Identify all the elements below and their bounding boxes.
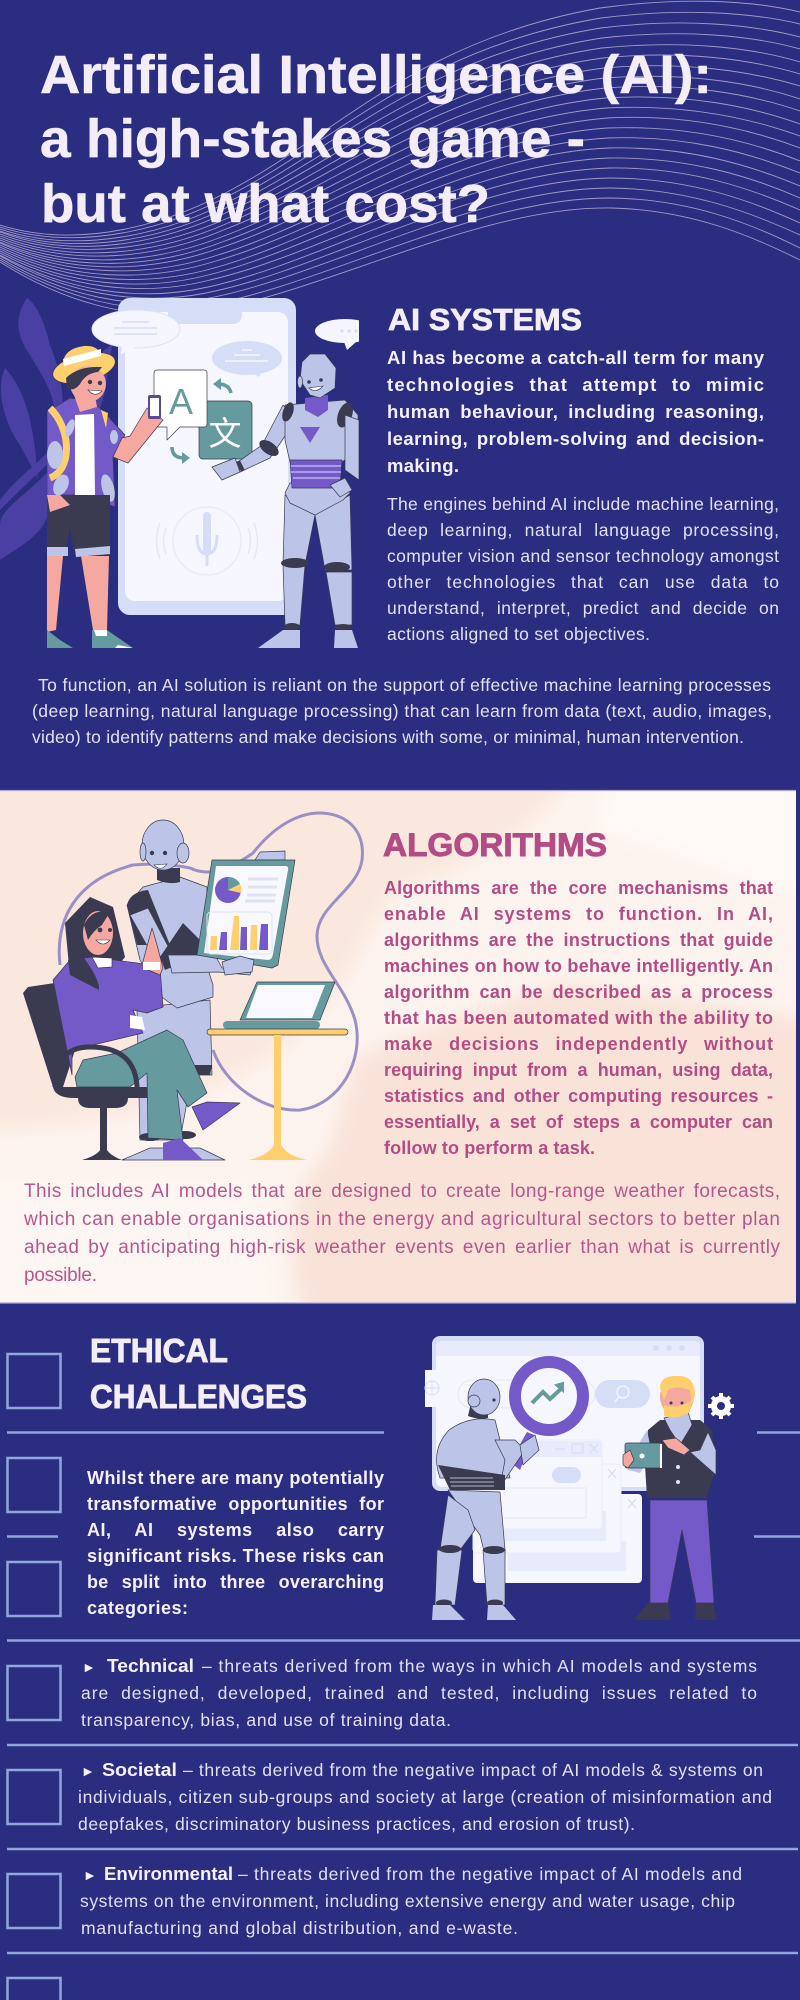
text block: environmental threats: Environmental	[104, 1863, 233, 1884]
text block: technical threats: transparency, bias, and use of training data.	[81, 1710, 451, 1730]
text block: environmental threats: ►	[83, 1867, 97, 1883]
phone	[118, 298, 296, 615]
text block: algorithm definition: that has been automated with the ability to	[384, 1008, 773, 1028]
heading: algorithms: ALGORITHMS	[383, 827, 607, 863]
speech bubbles	[92, 310, 375, 377]
heading: AI systems: AI SYSTEMS	[388, 302, 582, 337]
text block: algorithm definition: machines on how to behave intelligently. An	[384, 956, 773, 976]
text block: ethical intro: significant risks. These risks can	[87, 1546, 384, 1566]
heading: ethical challenges: ETHICAL	[90, 1332, 228, 1369]
text block: ethical intro: AI, AI systems also carry	[87, 1520, 384, 1540]
text block: algorithm definition: essentially, a set of steps a computer can	[384, 1112, 773, 1132]
text block: AI engines	[387, 494, 779, 644]
text block: societal threats: – threats derived from the negative impact of AI models & systems on	[183, 1760, 763, 1780]
checkbox squares	[8, 1354, 60, 2000]
title: but at what cost?	[41, 174, 490, 234]
text block: algorithm definition: algorithm can be described as a process	[384, 982, 773, 1002]
text block: AI engines: other technologies that can use data to	[387, 572, 779, 592]
text block: algorithm definition: make decisions independently without	[384, 1034, 773, 1054]
text block: weather forecasting example: ahead by anticipating high-risk weather events even earlier than what is currently	[24, 1237, 780, 1258]
text block: technical threats: ►	[82, 1659, 96, 1675]
title	[40, 45, 712, 234]
text block: AI engines: computer vision and sensor technology amongst	[387, 546, 779, 566]
panel background	[0, 770, 800, 1330]
text block: algorithm definition: Algorithms are the core mechanisms that	[384, 878, 773, 898]
text block: AI systems intro: human behaviour, including reasoning,	[387, 401, 764, 422]
text block: how AI functions: (deep learning, natural language processing) that can learn from data (text, audio, images,	[32, 701, 772, 721]
robot	[122, 820, 285, 1160]
text block: technical threats: Technical	[107, 1655, 194, 1676]
illustration: man and robot with translation phone	[47, 298, 375, 648]
heading: ethical challenges: CHALLENGES	[90, 1378, 307, 1415]
text block: environmental threats: manufacturing and global distribution, and e-waste.	[81, 1918, 518, 1938]
text block: ethical intro: Whilst there are many potentially	[87, 1468, 384, 1488]
text block: societal threats: Societal	[102, 1759, 177, 1780]
text block: technical threats: are designed, developed, trained and tested, including issues related to	[81, 1683, 757, 1703]
title: a high-stakes game -	[40, 109, 585, 169]
text block: ethical intro	[87, 1468, 384, 1618]
text block: AI systems intro	[387, 347, 765, 476]
translation cards: A	[169, 381, 193, 422]
table and laptop	[207, 982, 348, 1160]
text block: ethical intro: categories:	[87, 1598, 188, 1618]
text block: ethical intro: transformative opportunities for	[87, 1494, 384, 1514]
panel: ethical challenges	[7, 1332, 800, 2000]
text block: algorithm definition: statistics and other computing resources -	[384, 1086, 773, 1106]
icon: gear	[708, 1393, 734, 1419]
title: Artificial Intelligence (AI):	[40, 45, 712, 105]
translation cards: 文	[208, 415, 242, 452]
text block: technical threats	[81, 1655, 757, 1730]
text block: environmental threats: – threats derived from the negative impact of AI models and	[238, 1864, 742, 1884]
text block: AI systems intro: technologies that attempt to mimic	[387, 374, 764, 395]
illustration: robot and man with search windows	[425, 1336, 734, 1620]
text block: AI engines: actions aligned to set objectives.	[387, 624, 650, 644]
robot with magnifier	[432, 1362, 583, 1620]
text block: societal threats: ►	[81, 1763, 95, 1779]
browser windows	[432, 1336, 704, 1583]
text block: AI engines: understand, interpret, predict and decide on	[387, 598, 779, 618]
text block: ethical intro: be split into three overarching	[87, 1572, 384, 1592]
blob outline	[59, 813, 362, 1110]
text block: weather forecasting example	[23, 1181, 780, 1286]
text block: weather forecasting example: This includes AI models that are designed to create long-range weather forecasts,	[24, 1181, 780, 1202]
chair	[23, 983, 150, 1160]
panel: AI systems	[0, 298, 779, 747]
text block: environmental threats	[80, 1863, 742, 1938]
text block: AI systems intro: learning, problem-solving and decision-	[387, 428, 764, 449]
man with tablet	[623, 1376, 717, 1620]
text block: societal threats	[78, 1759, 772, 1834]
text block: AI systems intro: AI has become a catch-all term for many	[387, 347, 765, 368]
text block: algorithm definition: algorithms are the instructions that guide	[384, 930, 773, 950]
text block: AI engines: The engines behind AI include machine learning,	[387, 494, 779, 514]
translation cards	[154, 370, 252, 464]
text block: AI systems intro: making.	[387, 455, 459, 476]
text block: how AI functions: video) to identify patterns and make decisions with some, or minimal, human intervention.	[32, 727, 744, 747]
woman	[53, 897, 240, 1160]
text block: weather forecasting example: possible.	[24, 1265, 97, 1286]
robot	[212, 354, 359, 648]
tablet with charts	[197, 860, 295, 975]
text block: societal threats: deepfakes, discriminatory business practices, and erosion of trust).	[78, 1814, 635, 1834]
globe bubble	[425, 1370, 449, 1407]
decorative plant leaves	[0, 298, 112, 560]
text block: environmental threats: systems on the environment, including extensive energy and water usage, chip	[80, 1891, 735, 1911]
illustration: woman and robot with charts	[23, 813, 362, 1160]
panel: algorithms	[0, 770, 800, 1330]
text block: weather forecasting example: which can enable organisations in the energy and agricultural sectors to better plan	[23, 1209, 780, 1230]
text block: how AI functions: To function, an AI solution is reliant on the support of effective machine learning processes	[38, 675, 771, 695]
text block: how AI functions	[32, 675, 772, 747]
text block: algorithm definition: follow to perform a task.	[384, 1138, 595, 1158]
text block: algorithm definition	[384, 878, 773, 1158]
text block: algorithm definition: enable AI systems to function. In AI,	[384, 904, 773, 924]
text block: societal threats: individuals, citizen sub-groups and society at large (creation of misinformation and	[78, 1787, 772, 1807]
heading: ethical challenges	[90, 1332, 307, 1415]
text block: AI engines: deep learning, natural language processing,	[387, 520, 779, 540]
man in hat	[47, 346, 163, 648]
wave line pattern	[0, 1, 800, 314]
text block: technical threats: – threats derived from the ways in which AI models and systems	[202, 1656, 757, 1676]
text block: algorithm definition: requiring input from a human, using data,	[384, 1060, 773, 1080]
